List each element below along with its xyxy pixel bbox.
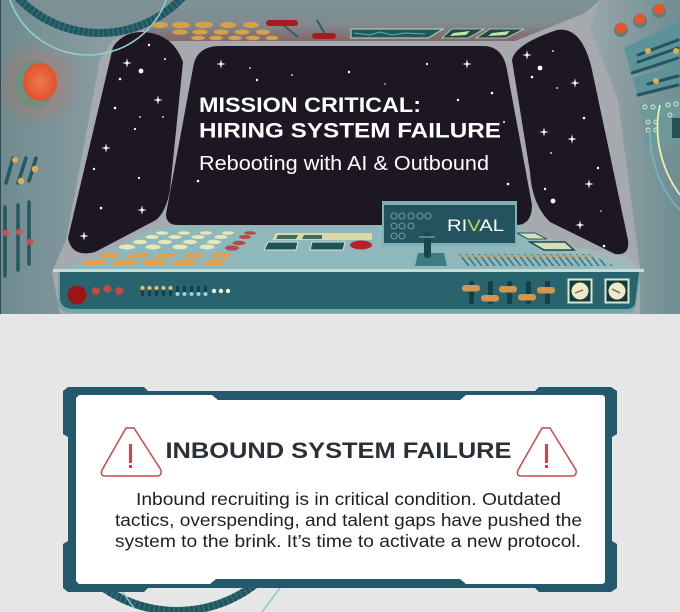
bottom ring decoration: [102, 588, 280, 612]
rival nameplate: [382, 201, 517, 246]
panel frame: [63, 387, 617, 592]
logo: RIVAL: RIVAL: [447, 216, 504, 235]
ceiling ring gauge: [0, 0, 213, 55]
left wall: [0, 0, 150, 314]
window: centre: [166, 46, 532, 225]
window: right: [512, 30, 628, 254]
body text: tactics, overspending, and talent gaps have pushed the: [115, 510, 582, 530]
panel body: [76, 395, 605, 584]
ceiling displays: [351, 29, 524, 38]
window: left: [68, 32, 183, 253]
fader field: [456, 254, 614, 266]
ceiling red switches: [266, 20, 336, 39]
red indicators: [92, 285, 124, 295]
title: HIRING SYSTEM FAILURE: [199, 120, 501, 142]
right wall: [590, 0, 680, 314]
indicator LEDs: [140, 286, 230, 296]
body text: system to the brink. It’s time to activate a new protocol.: [115, 531, 581, 551]
warning lamp: [0, 38, 84, 130]
power button: [68, 286, 86, 304]
left edge line: [0, 0, 1, 314]
icon: warning left: [101, 428, 161, 476]
title: [199, 94, 501, 142]
right wall lamps and panels: [614, 4, 680, 210]
body text: [115, 489, 582, 551]
ceiling orange buttons: [152, 22, 278, 40]
orange keys: [81, 253, 233, 265]
red buttons: [225, 231, 256, 251]
heading: INBOUND SYSTEM FAILURE: [166, 438, 512, 463]
ceiling: [108, 0, 600, 41]
centre displays: [264, 233, 372, 250]
console front: [53, 269, 644, 313]
title: MISSION CRITICAL:: [199, 94, 421, 117]
body text: Inbound recruiting is in critical condition. Outdated: [136, 489, 561, 509]
joystick: [415, 232, 447, 266]
console top: [53, 201, 644, 271]
panel: inbound system failure: [63, 387, 617, 592]
right small displays: [517, 233, 574, 250]
front faders: [462, 281, 555, 304]
dial gauges: [568, 280, 628, 302]
banner: spaceship cockpit: [0, 0, 680, 314]
icon: warning right: [517, 428, 576, 476]
stars: [79, 44, 605, 247]
cream buttons: [119, 231, 234, 250]
subtitle: Rebooting with AI & Outbound: [199, 152, 489, 175]
left wall sliders: [3, 157, 38, 276]
